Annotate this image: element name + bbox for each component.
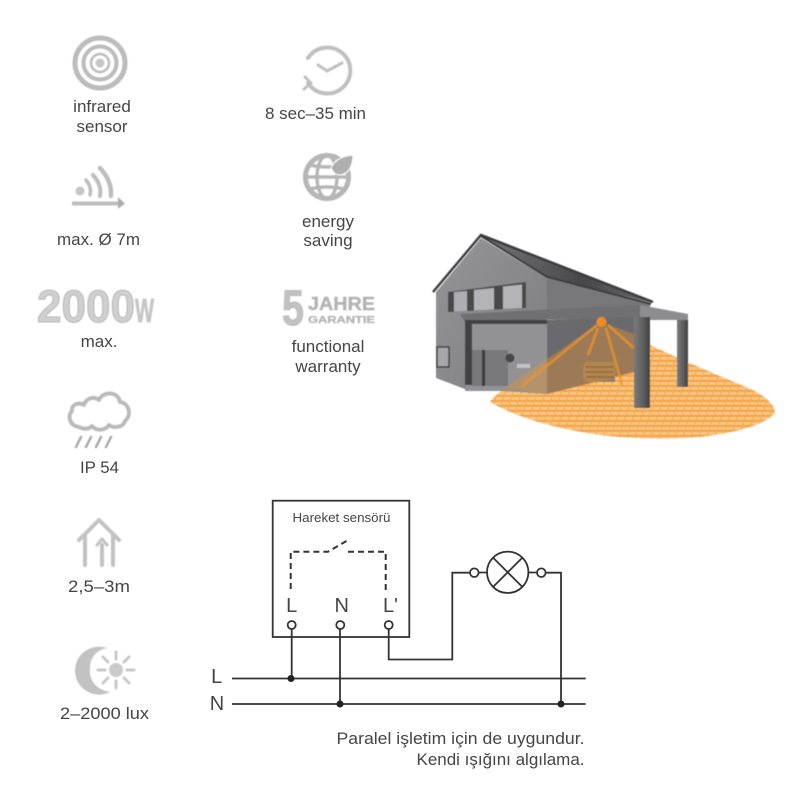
junction dots <box>288 675 564 708</box>
icon: 5 year warranty: 5 <box>282 280 304 336</box>
motion sensor dot <box>596 317 606 327</box>
roof <box>433 235 653 304</box>
terminals <box>288 568 546 629</box>
icon: detection range <box>72 168 125 209</box>
label: time range: 8 sec–35 min <box>265 104 366 123</box>
sensor box <box>273 501 409 637</box>
note text: Paralel işletim için de uygundur. <box>336 729 584 748</box>
bus lines <box>232 678 586 704</box>
label: IP 54: IP 54 <box>80 458 119 477</box>
house walls <box>436 238 650 394</box>
label: infrared sensor: infrared <box>73 97 131 116</box>
wiring diagram <box>210 501 586 715</box>
icon: 5 year warranty: JAHRE <box>308 294 375 314</box>
canopy band <box>460 305 640 322</box>
house illustration <box>433 235 775 439</box>
bus labels <box>210 666 224 715</box>
icon: 5 year warranty: GARANTIE <box>308 315 375 326</box>
note text: Kendi ışığını algılama. <box>416 750 584 769</box>
label: energy saving: saving <box>303 231 353 250</box>
terminal labels <box>286 595 398 617</box>
label: mounting height: 2,5–3m <box>68 577 130 596</box>
label: functional warranty: functional <box>292 337 364 356</box>
icon: mounting height <box>79 520 119 565</box>
bus labels: N <box>210 693 224 715</box>
icon: rain cloud <box>70 393 129 447</box>
carport pillars <box>634 317 688 408</box>
icon: moon and sun <box>75 647 134 695</box>
icon: 2000 W: 2000 <box>37 281 135 332</box>
terminal labels: N <box>334 595 349 617</box>
entrance and details <box>437 347 615 386</box>
bus labels: L <box>211 666 222 688</box>
icon: 5 year warranty <box>282 280 375 336</box>
label: functional warranty: warranty <box>294 357 361 376</box>
label: energy saving: energy <box>302 212 354 231</box>
icon: 2000 W: W <box>135 292 155 329</box>
dashed switch circuit <box>291 541 386 593</box>
label: lux range: 2–2000 lux <box>60 704 150 723</box>
sensor cone <box>505 322 634 394</box>
label: infrared sensor: sensor <box>76 117 128 136</box>
sensor box label: Hareket sensörü <box>292 510 390 525</box>
terminal labels: L' <box>383 595 398 617</box>
icon: infrared sensor <box>75 38 125 88</box>
icon: energy saving globe <box>306 155 353 198</box>
detection area on ground <box>490 340 775 439</box>
note text <box>336 729 584 769</box>
lamp symbol <box>479 552 537 593</box>
label: max range: max. Ø 7m <box>57 230 140 249</box>
icon: time clock <box>304 47 350 94</box>
connecting wires <box>292 573 561 704</box>
upper windows <box>448 282 526 312</box>
label: max: max. <box>81 332 117 351</box>
terminal labels: L <box>286 595 297 617</box>
